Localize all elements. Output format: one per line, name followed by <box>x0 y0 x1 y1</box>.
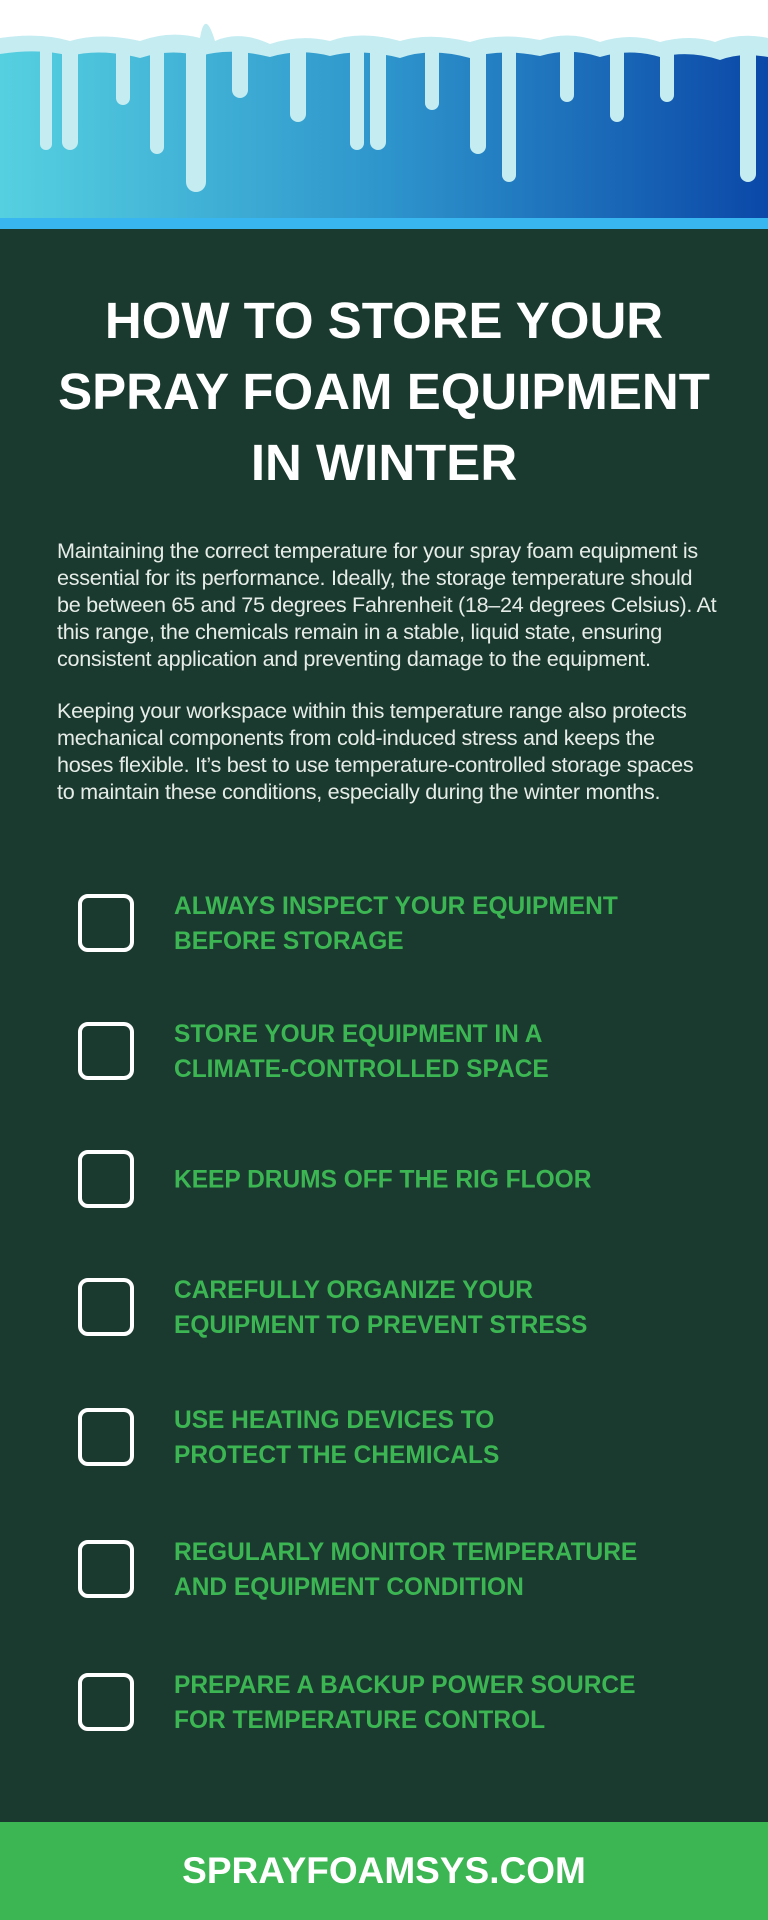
title: HOW TO STORE YOUR <box>105 292 663 349</box>
intro paragraph 2: hoses flexible. It’s best to use temperature-controlled storage spaces <box>57 752 693 777</box>
intro paragraph 1: Maintaining the correct temperature for your spray foam equipment is <box>57 538 698 563</box>
footer: SPRAYFOAMSYS.COM <box>182 1850 586 1891</box>
checklist item 6: REGULARLY MONITOR TEMPERATURE <box>174 1538 637 1566</box>
checklist item 1 <box>78 892 618 955</box>
intro paragraph 1: essential for its performance. Ideally, the storage temperature should <box>57 565 692 590</box>
checklist item 2: CLIMATE-CONTROLLED SPACE <box>174 1055 549 1083</box>
intro paragraph 2: to maintain these conditions, especially during the winter months. <box>57 779 660 804</box>
checklist item 5: PROTECT THE CHEMICALS <box>174 1441 499 1469</box>
checklist item 1: BEFORE STORAGE <box>174 927 404 955</box>
title <box>58 292 710 491</box>
checklist item 2: STORE YOUR EQUIPMENT IN A <box>174 1020 542 1048</box>
checklist item 7: PREPARE A BACKUP POWER SOURCE <box>174 1671 635 1699</box>
title: SPRAY FOAM EQUIPMENT <box>58 363 710 420</box>
checklist item 1: ALWAYS INSPECT YOUR EQUIPMENT <box>174 892 618 920</box>
checklist item 4 <box>78 1276 587 1339</box>
intro paragraph 1 <box>57 538 716 671</box>
checklist item 7 <box>78 1671 635 1734</box>
title: IN WINTER <box>251 434 517 491</box>
checklist item 3: KEEP DRUMS OFF THE RIG FLOOR <box>174 1166 591 1194</box>
checklist item 5 <box>78 1406 499 1469</box>
checklist item 3 <box>78 1150 591 1208</box>
intro paragraph 2: mechanical components from cold-induced stress and keeps the <box>57 725 655 750</box>
checklist item 2 <box>78 1020 549 1083</box>
intro paragraph 1: this range, the chemicals remain in a stable, liquid state, ensuring <box>57 619 662 644</box>
intro paragraph 2: Keeping your workspace within this temperature range also protects <box>57 698 687 723</box>
intro paragraph 1: consistent application and preventing damage to the equipment. <box>57 646 651 671</box>
intro paragraph 1: be between 65 and 75 degrees Fahrenheit (18–24 degrees Celsius). At <box>57 592 716 617</box>
checklist item 7: FOR TEMPERATURE CONTROL <box>174 1706 545 1734</box>
checklist item 5: USE HEATING DEVICES TO <box>174 1406 494 1434</box>
footer <box>0 1822 768 1920</box>
header: icicle banner <box>0 0 768 229</box>
checklist item 4: EQUIPMENT TO PREVENT STRESS <box>174 1311 587 1339</box>
checklist item 6: AND EQUIPMENT CONDITION <box>174 1573 524 1601</box>
intro paragraph 2 <box>57 698 693 804</box>
checklist item 4: CAREFULLY ORGANIZE YOUR <box>174 1276 533 1304</box>
checklist item 6 <box>78 1538 637 1601</box>
